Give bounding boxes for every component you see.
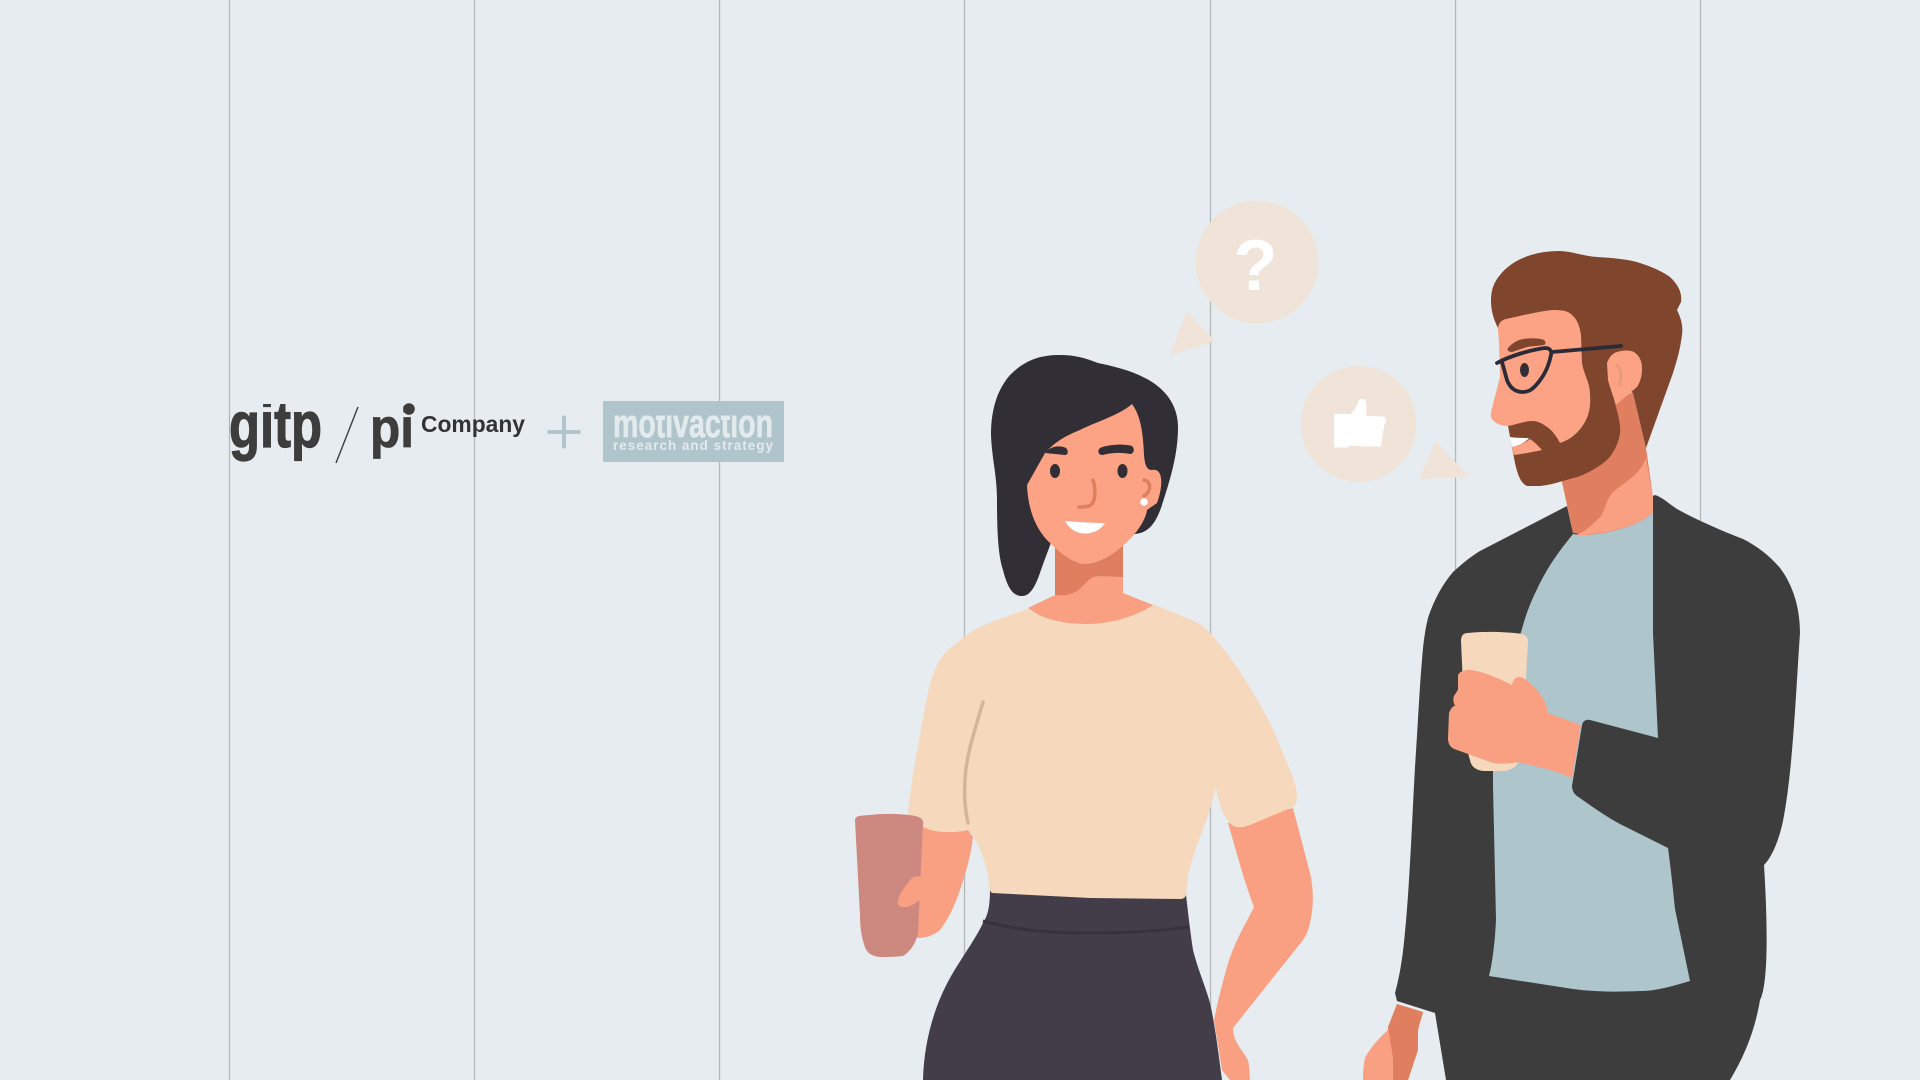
- woman: arm holding cup: [917, 827, 973, 938]
- man: lower hand: [1363, 1004, 1423, 1080]
- man: t-shirt: [1489, 512, 1690, 992]
- woman: nose and ear detail: [1079, 480, 1150, 507]
- man: hair and beard: [1491, 251, 1682, 486]
- man: glasses: [1497, 346, 1621, 392]
- speech bubble: question: ?: [1234, 226, 1277, 306]
- man: neck: [1562, 393, 1653, 535]
- woman: blouse: [908, 604, 1297, 899]
- logo: pi Company: Company: [421, 411, 525, 437]
- woman: thumb: [898, 876, 922, 907]
- woman: eyebrows: [1045, 445, 1134, 455]
- speech bubble: question: [1170, 201, 1318, 355]
- man: cup: [1461, 632, 1528, 771]
- woman: blouse crease: [965, 702, 983, 823]
- man: ear: [1607, 350, 1642, 405]
- man: [1363, 251, 1800, 1080]
- woman: neck: [1055, 530, 1123, 600]
- logo: pi Company: [370, 396, 525, 459]
- man: face: [1491, 310, 1590, 443]
- woman: earring: [1140, 498, 1148, 506]
- man: jacket: [1395, 495, 1800, 1080]
- woman: eyes: [1050, 464, 1128, 478]
- woman: [855, 355, 1313, 1080]
- woman: skirt: [923, 882, 1222, 1080]
- logo: motivaction: research and strategy: [613, 438, 773, 453]
- woman: cup: [855, 814, 923, 957]
- logo: pi Company: pi: [370, 396, 414, 459]
- logo divider slash: [336, 407, 358, 463]
- man: hand holding cup: [1448, 670, 1581, 778]
- woman: neck highlight: [1028, 576, 1153, 624]
- man: eye: [1520, 363, 1529, 377]
- logo: motivaction: motivaction: [613, 402, 773, 446]
- man: mouth: [1510, 437, 1542, 455]
- speech bubble: thumbs up: [1301, 366, 1469, 482]
- woman: skirt belt line: [983, 921, 1189, 933]
- woman: right arm: [1214, 808, 1313, 1080]
- logo: motivaction: [603, 401, 784, 462]
- woman: hair: [991, 355, 1178, 596]
- man: eyebrow: [1508, 338, 1546, 352]
- logo: gitp: gitp: [229, 388, 322, 461]
- woman: face: [1027, 404, 1161, 564]
- plus sign: [549, 418, 579, 446]
- woman: smile: [1065, 521, 1105, 534]
